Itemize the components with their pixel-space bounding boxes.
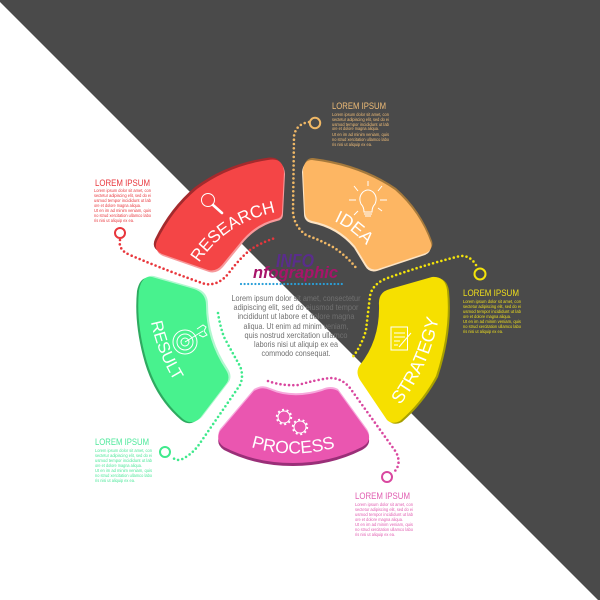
center title: INFO [276,251,314,271]
process text block: Lorem ipsum dolor sit amet, con [355,502,413,507]
idea text block: Lorem ipsum dolor sit amet, con [332,112,389,117]
result text block: sectetur adipiscing elit, sed do ei [95,453,152,458]
center title: nfographic [253,263,339,282]
strategy text block [463,288,522,334]
research text block: no strud xercitation ullamco labo [94,213,151,218]
result text block: ore et dolore magna aliqua. [95,463,142,468]
center paragraph: commodo consequat. [262,348,330,358]
research text block: ris nisi ut aliquip ex ea. [94,218,134,223]
idea text block: LOREM IPSUM [332,101,386,112]
panel: idea [292,101,432,272]
result text block: Ut en im ad minim veniam, quis [95,468,153,473]
panel: research [94,158,285,286]
center paragraph: adipiscing elit, sed do eiusmod tempor [234,302,359,312]
process text block [355,491,414,537]
center paragraph: aliqua. Ut enim ad minim veniam, [244,321,348,331]
result label: RESULT [151,320,184,378]
process node [382,472,392,482]
icon: gears [277,410,307,434]
result connector [171,313,242,460]
research label: RESEARCH [190,201,274,262]
result text block: usmod tempor incididunt ut lab [95,458,152,463]
research node [115,228,125,238]
idea text block [332,101,390,147]
idea segment shape [302,158,432,271]
idea text block: Ut en im ad minim veniam, quis [332,132,390,137]
result text block: ris nisi ut aliquip ex ea. [95,478,135,483]
icon: light bulb [349,181,387,216]
process text block: no strud xercitation ullamco labo [355,527,413,532]
strategy node [474,268,486,280]
center paragraph: incididunt ut labore et dolore magna [238,311,355,321]
research text block: sectetur adipiscing elit, sed do ei [94,193,151,198]
strategy text block: no strud xercitation ullamco labo [463,324,521,329]
strategy text block: Lorem ipsum dolor sit amet, con [463,299,521,304]
result text block: no strud xercitation ullamco labo [95,473,152,478]
idea text block: usmod tempor incididunt ut lab [332,122,389,127]
center paragraph: quis nostrud xercitation ullamco [244,330,348,340]
process text block: sectetur adipiscing elit, sed do ei [355,507,413,512]
idea text block: ris nisi ut aliquip ex ea. [332,142,372,147]
idea connector [293,122,357,269]
strategy connector [352,256,476,358]
strategy text block: sectetur adipiscing elit, sed do ei [463,304,521,309]
panel: result [95,276,244,483]
center paragraph: Lorem ipsum dolor sit amet, consectetur [232,293,361,303]
research text block: LOREM IPSUM [95,178,150,189]
panel: strategy [352,254,522,424]
icon: magnifier [202,194,222,213]
strategy segment shape [358,277,450,424]
research text block: ore et dolore magna aliqua. [94,203,141,208]
research connector [120,238,275,284]
process text block: Ut en im ad minim veniam, quis [355,522,414,527]
center paragraph [232,293,361,358]
result segment shape [136,276,230,423]
strategy text block: LOREM IPSUM [463,288,519,299]
strategy text block: ore et dolore magna aliqua. [463,314,511,319]
research segment shape [154,158,285,272]
process connector [268,378,399,472]
result text block: LOREM IPSUM [95,437,149,448]
process label: PROCESS [252,436,334,454]
result node [160,447,170,457]
idea text block: ore et dolore magna aliqua. [332,126,379,131]
idea text block: no strud xercitation ullamco labo [332,137,389,142]
result text block [95,437,153,483]
strategy text block: ris nisi ut aliquip ex ea. [463,329,503,334]
process text block: usmod tempor incididunt ut lab [355,512,413,517]
process text block: LOREM IPSUM [355,491,410,502]
idea label: IDEA [336,210,372,246]
research text block: usmod tempor incididunt ut lab [94,198,151,203]
center paragraph: laboris nisi ut aliquip ex ea [254,339,338,349]
panel: process [218,376,414,537]
center title [253,251,339,282]
strategy label: STRATEGY [392,316,438,403]
research text block [94,178,152,223]
strategy text block: usmod tempor incididunt ut lab [463,309,521,314]
idea text block: sectetur adipiscing elit, sed do ei [332,117,389,122]
research text block: Lorem ipsum dolor sit amet, con [94,188,151,193]
process text block: ris nisi ut aliquip ex ea. [355,532,395,537]
process text block: ore et dolore magna aliqua. [355,517,403,522]
research text block: Ut en im ad minim veniam, quis [94,208,152,213]
icon: target with arrow [173,325,207,354]
strategy text block: Ut en im ad minim veniam, quis [463,319,522,324]
result text block: Lorem ipsum dolor sit amet, con [95,448,152,453]
idea node [310,118,320,128]
center divider [241,283,343,285]
icon: document and pencil [391,327,411,350]
process segment shape [218,386,369,466]
